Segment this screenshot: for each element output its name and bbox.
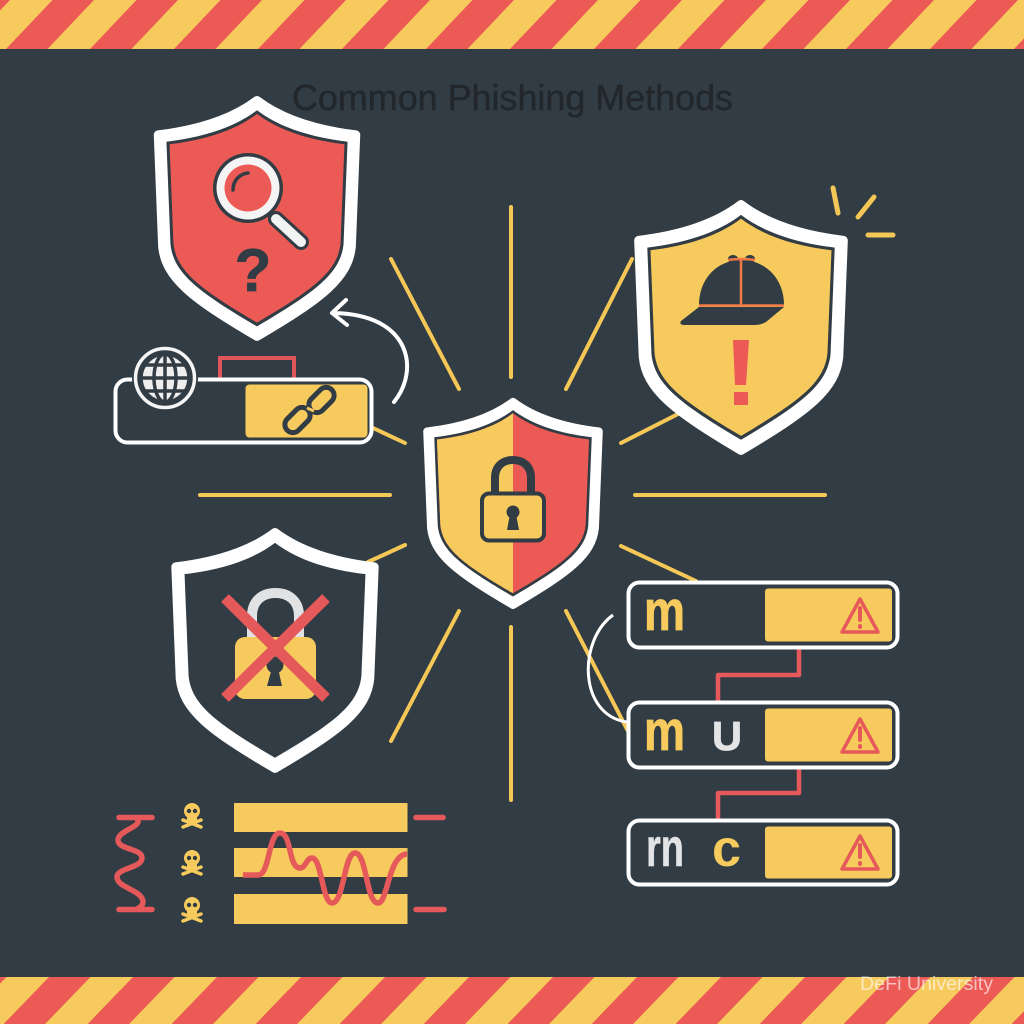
panel: magnifier shield (top left) [158, 100, 356, 336]
arrow: curved arrow to magnifier shield [332, 300, 407, 402]
title: Common Phishing Methods [292, 77, 733, 118]
panel: domain bar 2 [628, 699, 898, 768]
panel: address bar with link [116, 345, 372, 442]
icon: warning triangle [842, 836, 878, 869]
icon: exclamation mark [733, 340, 749, 405]
icon: crossed-out padlock [225, 593, 326, 699]
panel: broken lock shield (bottom left) [176, 532, 374, 768]
panel: domain bar 2: m [644, 699, 685, 763]
panel: domain bar 3: c [712, 820, 741, 878]
bottom hazard stripe band [0, 977, 1024, 1024]
icon: central padlock [482, 460, 544, 540]
curved connector to second domain bar [588, 615, 627, 722]
panel: domain bar 1 [628, 579, 898, 648]
icon: warning triangle [842, 599, 878, 632]
panel: domain bar 2: U [712, 713, 742, 759]
skull icons [183, 803, 201, 921]
icon: warning triangle [842, 719, 878, 752]
red connectors between domain bars [718, 649, 799, 819]
panel: domain bar 3 [628, 818, 898, 884]
radial connector lines [200, 207, 825, 800]
icon: hat [680, 255, 784, 325]
panel: detective hat shield (top right) [639, 205, 843, 450]
panel: domain bar 1: m [644, 579, 685, 643]
red wave chart line [243, 833, 407, 903]
icon: alert sparks [833, 188, 893, 235]
panel: central split shield [427, 402, 599, 605]
watermark: DeFi University [860, 973, 993, 995]
icon: chain link [282, 384, 337, 436]
panel: threat bars with waves [117, 803, 444, 924]
yellow bars [234, 803, 408, 924]
right dashes [416, 818, 444, 910]
icon: magnifying glass [213, 153, 301, 242]
panel: domain bar 3: rn [646, 818, 684, 878]
left squiggle [117, 818, 152, 910]
top hazard stripe band [0, 0, 1024, 49]
icon: question mark: ? [235, 237, 271, 304]
icon: globe [132, 345, 198, 411]
